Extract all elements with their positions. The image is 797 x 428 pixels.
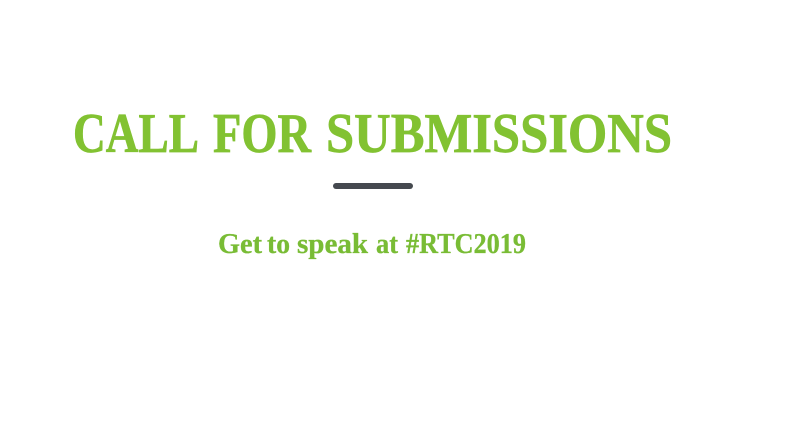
subtitle: Get (218, 229, 263, 260)
subtitle: speak (297, 229, 368, 260)
divider bar (333, 183, 413, 189)
title (73, 103, 672, 165)
title: SUBMISSIONS (326, 103, 672, 165)
title: FOR (213, 103, 311, 165)
subtitle: to (267, 229, 290, 260)
subtitle: #RTC2019 (406, 229, 526, 260)
subtitle: at (376, 229, 399, 260)
title: CALL (73, 103, 199, 165)
subtitle (218, 229, 526, 260)
